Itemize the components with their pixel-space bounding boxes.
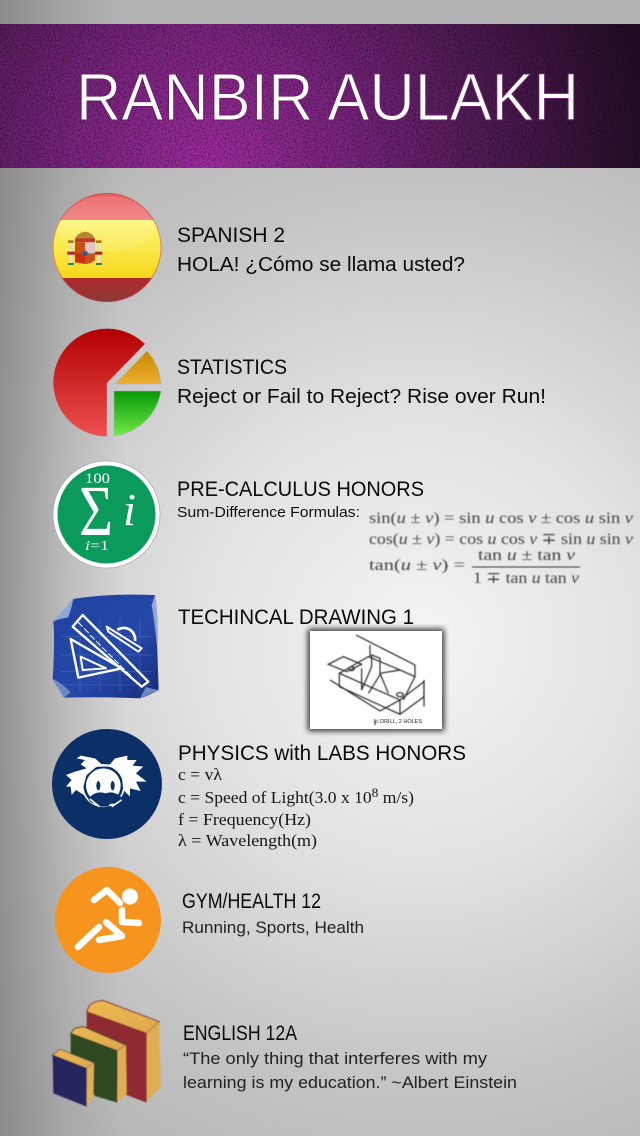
heading: PRE-CALCULUS HONORS	[177, 478, 424, 501]
text: wavelength: λ = Wavelength(m)	[178, 831, 317, 850]
panel: Technical Drawing 1	[53, 595, 444, 731]
title: RANBIR AULAKH	[76, 60, 579, 135]
icon: blueprint with ruler and set square	[53, 595, 159, 698]
panel: Pre-Calculus Honors	[53, 461, 634, 587]
technical drawing image	[308, 629, 444, 731]
heading: STATISTICS	[177, 356, 287, 379]
formulas	[369, 510, 634, 587]
banner background	[0, 24, 640, 168]
text: greeting: HOLA! ¿Cómo se llama usted?	[177, 254, 465, 276]
icon: Einstein face	[52, 729, 162, 839]
text: gym topics: Running, Sports, Health	[182, 918, 364, 937]
panel: Statistics	[53, 329, 546, 436]
text: wave formula: c = vλ	[178, 765, 223, 784]
icon: runner	[55, 867, 161, 973]
formulas: tan u ± tan v	[478, 547, 576, 564]
text: speed of light: m/s)	[378, 788, 414, 807]
icon: summation badge: 100	[85, 471, 110, 487]
icon: Spanish flag globe	[52, 193, 162, 303]
text: speed of light: 8	[372, 785, 378, 800]
technical drawing image: ½ DRILL, 2 HOLES	[374, 718, 422, 725]
icon: summation badge: i	[123, 484, 136, 535]
heading: ENGLISH 12A	[183, 1022, 297, 1045]
heading: TECHINCAL DRAWING 1	[178, 606, 414, 629]
formulas: tan( u ± v) =	[369, 557, 465, 574]
formulas: cos(u ± v) = cos u cos v ∓ sin u sin v	[369, 531, 634, 548]
icon: summation badge: i=1	[85, 539, 109, 554]
panel: Physics with Labs Honors	[52, 729, 466, 850]
formulas: sin(u ± v) = sin u cos v ± cos u sin v	[369, 510, 634, 527]
text: Einstein quote line two: learning is my education.” ~Albert Einstein	[183, 1073, 517, 1092]
panel: Spanish 2	[52, 193, 465, 303]
icon: coat of arms	[67, 232, 102, 265]
icon: pie chart	[53, 329, 161, 436]
text: formulas label: Sum-Difference Formulas:	[177, 504, 360, 521]
panel: English 12A	[53, 1001, 517, 1107]
icon: summation badge: Σ	[79, 471, 113, 551]
heading: PHYSICS with LABS HONORS	[178, 742, 466, 765]
formulas: 1 ∓ tan u tan v	[473, 570, 580, 587]
text: Einstein quote line one: “The only thing that interferes with my	[183, 1049, 488, 1068]
text: frequency: f = Frequency(Hz)	[178, 810, 311, 829]
text: statistics note: Reject or Fail to Reject? Rise over Run!	[177, 386, 546, 408]
isometric sketch	[328, 635, 424, 725]
icon: stack of books	[53, 1001, 161, 1107]
heading: SPANISH 2	[177, 224, 285, 247]
heading: GYM/HEALTH 12	[182, 890, 321, 913]
text: speed of light: c = Speed of Light(3.0 x 10	[178, 788, 366, 807]
icon: summation badge	[53, 461, 160, 568]
header banner	[0, 24, 640, 168]
panel: Gym/Health 12	[55, 867, 364, 973]
